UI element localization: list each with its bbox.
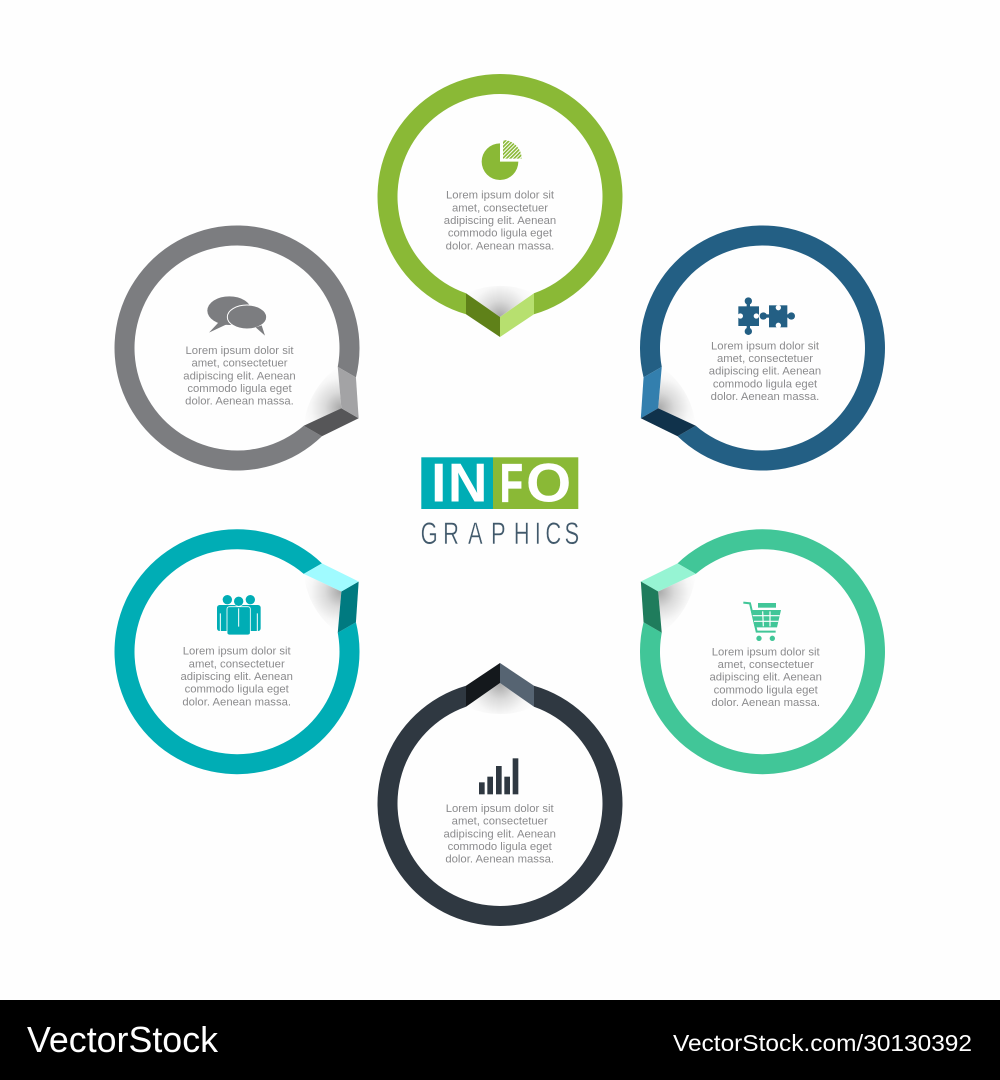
text block: adipiscing elit. Aenean <box>183 370 296 382</box>
icon: pie chart <box>482 140 522 180</box>
logo word GRAPHICS: GRAPHICS <box>421 515 579 551</box>
text block: Lorem ipsum dolor sit <box>712 646 821 658</box>
gray ring with fold <box>70 181 420 524</box>
text block: dolor. Aenean massa. <box>711 391 819 403</box>
text block: adipiscing elit. Aenean <box>709 672 822 684</box>
panel: green circle top <box>378 74 622 337</box>
icon: bar chart <box>479 758 518 794</box>
green ring with fold <box>378 74 622 337</box>
text block: adipiscing elit. Aenean <box>180 671 293 683</box>
text block: commodo ligula eget <box>185 684 290 696</box>
logo word INFO: N <box>448 452 487 514</box>
text block: dolor. Aenean massa. <box>446 240 554 252</box>
panel: gray circle left upper <box>70 181 420 524</box>
footer brand: VectorStock <box>27 1019 219 1060</box>
footer bar <box>0 1000 1000 1080</box>
text block: Lorem ipsum dolor sit <box>711 340 820 352</box>
logo word INFO: O <box>526 452 571 514</box>
blue ring with fold <box>580 181 930 524</box>
text block: Lorem ipsum dolor sit <box>446 803 555 815</box>
dark ring with fold <box>378 663 622 926</box>
panel: teal circle left lower <box>70 475 420 819</box>
text block: dolor. Aenean massa. <box>711 697 820 709</box>
text block: dolor. Aenean massa. <box>182 696 291 708</box>
text block: amet, consectetuer <box>452 202 548 214</box>
text block: commodo ligula eget <box>448 228 553 240</box>
text block: adipiscing elit. Aenean <box>443 828 556 840</box>
logo word INFO: F <box>500 454 523 514</box>
logo teal block <box>421 457 493 509</box>
icon: shopping cart <box>743 603 781 641</box>
panel: dark circle bottom <box>378 663 622 926</box>
text block: amet, consectetuer <box>452 816 548 828</box>
text block: dolor. Aenean massa. <box>445 854 554 866</box>
text block: amet, consectetuer <box>718 659 814 671</box>
icon: speech bubbles <box>207 296 267 336</box>
icon: group of people <box>217 595 261 635</box>
text block: amet, consectetuer <box>191 358 288 370</box>
text block: Lorem ipsum dolor sit <box>446 190 555 202</box>
text block: commodo ligula eget <box>713 378 818 390</box>
text block: adipiscing elit. Aenean <box>709 366 821 378</box>
logo word INFO: I <box>431 452 446 514</box>
text block: Lorem ipsum dolor sit <box>186 345 294 357</box>
logo word INFO <box>431 452 571 514</box>
text block: amet, consectetuer <box>717 353 813 365</box>
mint ring with fold <box>580 475 930 819</box>
text block: Lorem ipsum dolor sit <box>183 646 292 658</box>
text block: amet, consectetuer <box>189 658 285 670</box>
footer image id: VectorStock.com/30130392 <box>673 1030 972 1056</box>
text block: adipiscing elit. Aenean <box>444 215 556 227</box>
text block: dolor. Aenean massa. <box>185 396 294 408</box>
text block: commodo ligula eget <box>187 383 292 395</box>
icon: puzzle pieces <box>738 297 795 335</box>
teal ring with fold <box>70 475 420 819</box>
text block: commodo ligula eget <box>714 684 819 696</box>
logo green block <box>493 457 578 509</box>
text block: commodo ligula eget <box>448 841 553 853</box>
panel: mint circle right lower <box>580 475 930 819</box>
panel: blue circle right upper <box>580 181 930 524</box>
logo: INFO GRAPHICS <box>421 452 579 551</box>
